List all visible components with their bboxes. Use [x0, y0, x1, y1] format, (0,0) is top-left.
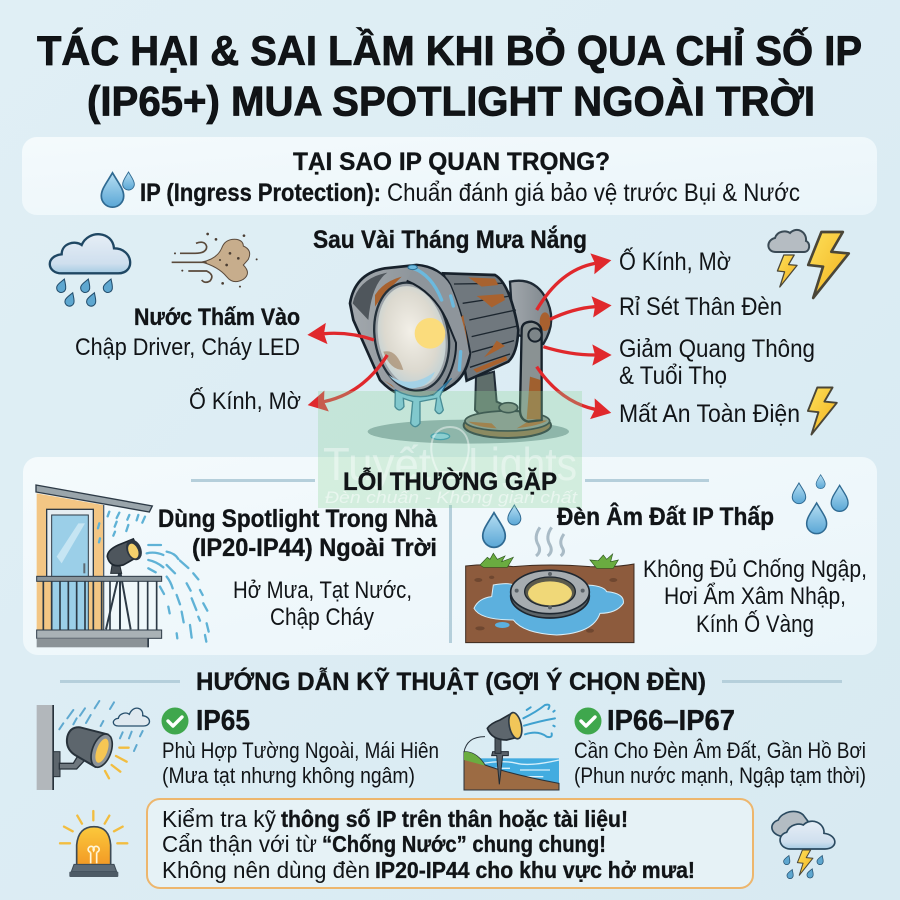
- text: in-ground light mistake: Không Đủ Chống Ngập,: [643, 556, 867, 583]
- labels: right effects: Mất An Toàn Điện: [619, 400, 800, 428]
- icon: alarm light: [60, 811, 127, 877]
- illustration: weathered spotlight: [324, 263, 595, 444]
- heading: technical guide: HƯỚNG DẪN KỸ THUẬT (GỢI Ý CHỌN ĐÈN): [196, 666, 706, 696]
- labels: left effects: Chập Driver, Cháy LED: [75, 334, 300, 361]
- block: IP65: IP65: [196, 705, 250, 737]
- labels: left effects: Ố Kính, Mờ: [189, 387, 301, 415]
- text: in-ground light mistake: [557, 501, 867, 638]
- icon: rain cloud: [50, 234, 130, 307]
- title: [37, 26, 862, 124]
- text: in-ground light mistake: Hơi Ẩm Xâm Nhập,: [664, 582, 846, 610]
- labels: right effects: Giảm Quang Thông: [619, 335, 815, 363]
- text: indoor spotlight mistake: Chập Cháy: [270, 604, 374, 631]
- labels: left effects: Nước Thấm Vào: [134, 304, 300, 331]
- callout: warnings: IP20-IP44 cho khu vực hở mưa!: [375, 857, 695, 883]
- callout: warnings: Không nên dùng đèn: [162, 857, 370, 883]
- text: in-ground light mistake: Kính Ố Vàng: [696, 610, 814, 638]
- title: TÁC HẠI & SAI LẦM KHI BỎ QUA CHỈ SỐ IP: [37, 26, 862, 74]
- labels: right effects: Rỉ Sét Thân Đèn: [619, 293, 782, 321]
- watermark: Đèn chuẩn - Không gian chất: [325, 488, 578, 507]
- block: IP65: Phù Hợp Tường Ngoài, Mái Hiên: [162, 738, 439, 763]
- arrows: damage effects: [324, 263, 595, 409]
- text: IP definition: IP (Ingress Protection):: [140, 179, 381, 207]
- block: IP66-IP67: IP66–IP67: [607, 705, 735, 737]
- text: indoor spotlight mistake: Hở Mưa, Tạt Nước,: [233, 577, 412, 604]
- icon: green check: [574, 708, 602, 734]
- icon: water drops right: [792, 475, 848, 534]
- block: IP66-IP67: [574, 705, 866, 788]
- text: indoor spotlight mistake: (IP20-IP44) Ngoài Trời: [192, 534, 437, 562]
- illustration: IP66-IP67 garden spike light: [464, 705, 559, 790]
- text: indoor spotlight mistake: [158, 505, 437, 631]
- icon: storm cloud and lightning: [768, 230, 849, 298]
- icon: green check: [162, 708, 188, 734]
- text: IP definition: Chuẩn đánh giá bảo vệ trước Bụi & Nước: [387, 179, 800, 207]
- illustration: in-ground light in puddle: [466, 505, 634, 643]
- title: (IP65+) MUA SPOTLIGHT NGOÀI TRỜI: [87, 76, 815, 124]
- labels: right effects: [619, 246, 815, 428]
- heading: why IP matters: TẠI SAO IP QUAN TRỌNG?: [293, 148, 610, 176]
- watermark: Lights: [468, 438, 577, 490]
- text: indoor spotlight mistake: Dùng Spotlight Trong Nhà: [158, 505, 437, 533]
- block: IP65: (Mưa tạt nhưng không ngâm): [162, 763, 415, 788]
- callout: warnings: thông số IP trên thân hoặc tài liệu!: [281, 806, 628, 832]
- text: in-ground light mistake: Đèn Âm Đất IP Thấp: [557, 501, 774, 531]
- icon: electrical danger bolt: [808, 388, 837, 434]
- heading: after months of rain and sun: Sau Vài Tháng Mưa Nắng: [313, 224, 587, 254]
- labels: right effects: & Tuổi Thọ: [619, 362, 727, 390]
- icon: water drops: [101, 172, 134, 207]
- callout: warnings: [147, 799, 753, 888]
- text: IP definition: [140, 179, 800, 207]
- labels: left effects: [75, 304, 301, 415]
- callout: warnings: “Chống Nước” chung chung!: [322, 831, 606, 857]
- heading: technical guide: [60, 666, 842, 696]
- heading: common mistakes: LỖI THƯỜNG GẶP: [343, 466, 557, 496]
- illustration: indoor spotlight on balcony: [36, 485, 209, 647]
- icon: dust wind: [172, 233, 258, 288]
- callout: warnings: Cẩn thận với từ: [162, 831, 317, 857]
- callout: warnings: Kiểm tra kỹ: [162, 806, 276, 832]
- icon: thunder cloud: [772, 811, 835, 880]
- watermark: Tuyết: [323, 438, 431, 490]
- illustration: IP65 wall light: [37, 701, 149, 790]
- block: IP65: [162, 705, 439, 788]
- labels: right effects: Ố Kính, Mờ: [619, 246, 731, 276]
- panel: common mistakes: [23, 457, 877, 655]
- watermark: [318, 391, 582, 508]
- panel: why IP matters: [22, 137, 877, 215]
